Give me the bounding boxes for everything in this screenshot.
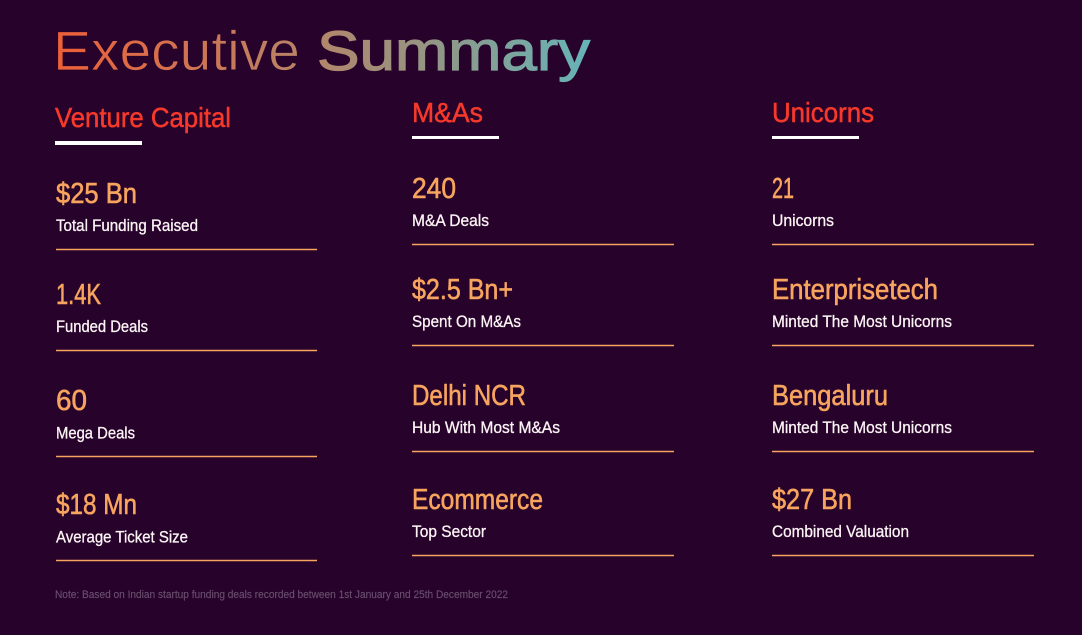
stat: enterprisetech (772, 274, 1034, 346)
stat: combined valuation (772, 484, 1034, 556)
stat: average ticket size: $18 Mn (56, 489, 137, 521)
stat: funded deals: 1.4K (56, 279, 101, 311)
stat: enterprisetech: Enterprisetech (772, 274, 938, 306)
stat: hub with most M&As: Hub With Most M&As (412, 418, 560, 437)
footnote: Note: Based on Indian startup funding deals recorded between 1st January and 25th December 2022 (55, 589, 508, 601)
stat: mega deals (56, 385, 317, 456)
stat: combined valuation: $27 Bn (772, 484, 852, 516)
stat: unicorn count: Unicorns (772, 211, 834, 230)
stat: total funding: Total Funding Raised (56, 216, 198, 235)
stat: enterprisetech: Minted The Most Unicorns (772, 312, 952, 331)
stat: average ticket size (56, 489, 317, 560)
heading: venture capital (55, 102, 231, 145)
panel: venture capital (55, 102, 317, 560)
heading: unicorns (772, 97, 874, 139)
panel: unicorns (772, 97, 1034, 556)
stat: M&A deals (412, 173, 674, 244)
heading: venture capital: Venture Capital (55, 102, 231, 133)
stat: unicorn count: 21 (772, 173, 794, 205)
stat: bengaluru: Minted The Most Unicorns (772, 418, 952, 437)
stat: M&A deals: 240 (412, 173, 456, 205)
title (53, 19, 590, 82)
panel: M&As (412, 97, 674, 556)
heading: M&As (412, 97, 499, 139)
stat: spent on M&As (412, 274, 674, 346)
stat: unicorn count (772, 173, 1034, 244)
stat: top sector: Ecommerce (412, 484, 543, 516)
stat: spent on M&As: $2.5 Bn+ (412, 274, 513, 306)
stat: total funding (56, 178, 317, 250)
stat: hub with most M&As (412, 380, 674, 452)
stat: bengaluru: Bengaluru (772, 380, 888, 412)
stat: top sector (412, 484, 674, 556)
stat: top sector: Top Sector (412, 522, 486, 541)
stat: funded deals (56, 279, 317, 350)
stat: mega deals: Mega Deals (56, 424, 135, 442)
stat: bengaluru (772, 380, 1034, 452)
title: Executive (53, 19, 300, 82)
title: Summary (317, 19, 590, 82)
heading: M&As: M&As (412, 97, 483, 128)
stat: total funding: $25 Bn (56, 178, 137, 210)
heading: unicorns: Unicorns (772, 97, 874, 128)
stat: combined valuation: Combined Valuation (772, 522, 909, 541)
stat: average ticket size: Average Ticket Size (56, 528, 188, 546)
stat: spent on M&As: Spent On M&As (412, 312, 521, 331)
stat: hub with most M&As: Delhi NCR (412, 380, 526, 412)
stat: mega deals: 60 (56, 385, 87, 417)
stat: funded deals: Funded Deals (56, 317, 148, 336)
stat: M&A deals: M&A Deals (412, 211, 489, 230)
